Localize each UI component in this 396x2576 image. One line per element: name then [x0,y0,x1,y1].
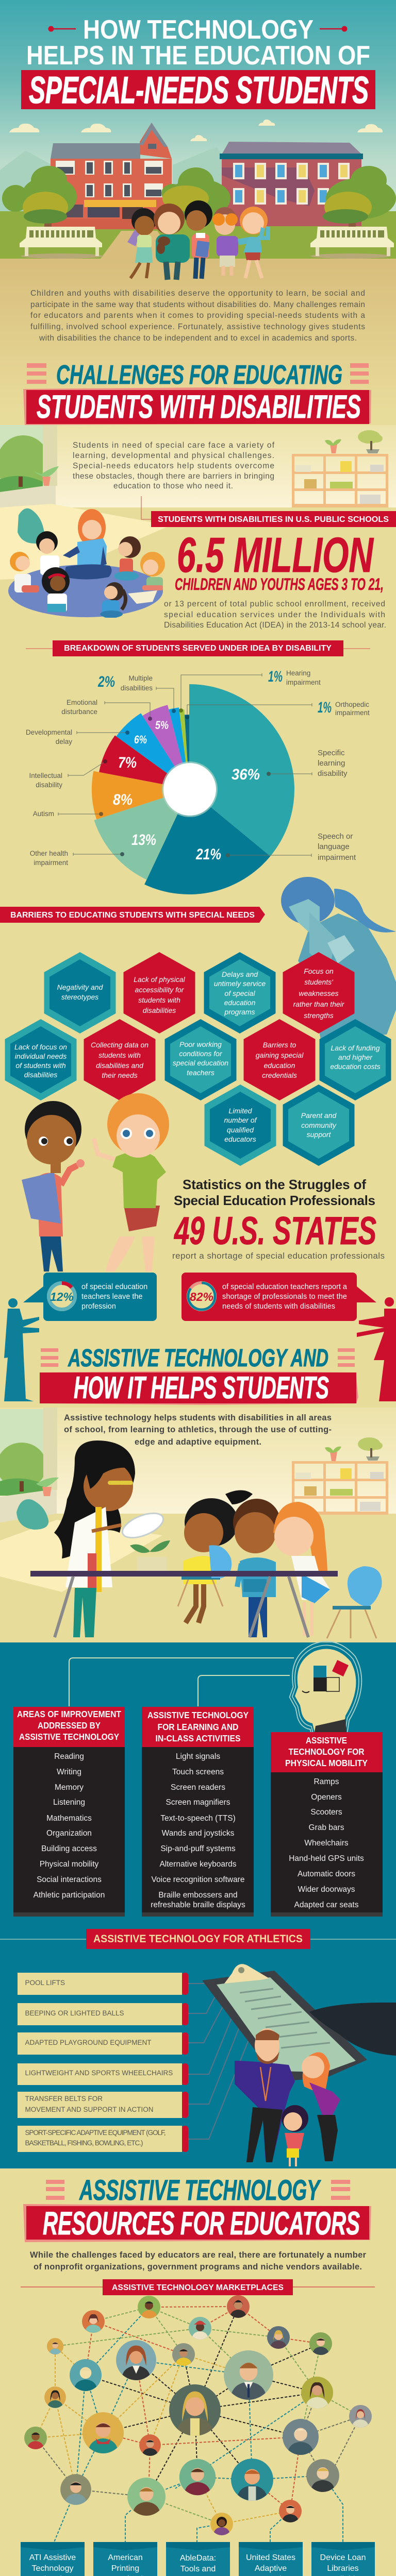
pie category labels [26,669,370,867]
marketplace boxes [21,2542,375,2576]
hexagon: individual needs [5,1019,76,1100]
panel: physical mobility: Wheelchairs [304,1839,349,1848]
panel: physical mobility: Scooters [310,1808,342,1817]
box: AbleData: Tools and [180,2565,216,2573]
hero scene: school campus [0,0,396,412]
pie category labels: Speech or [318,832,353,841]
stat box: 12 percent: profession [81,1302,116,1311]
list item: pool lifts: POOL LIFTS [25,1979,65,1987]
hexagon: delays: programs [224,1008,255,1016]
small percent labels: 1% [268,668,283,685]
box: Device loan: Device Loan [320,2553,366,2562]
pie category labels: disturbance [61,708,97,716]
hexagon: credentials: education [264,1061,295,1070]
hexagon: working conditions: special education [173,1059,228,1067]
box: ATI: ATI Assistive [29,2553,76,2562]
intro paragraph: fulfilling, involved school experience. Fortunately, assistive technology gives students [30,323,365,331]
list item: sport specific: BASKETBALL, FISHING, BOWLING, ETC.) [25,2139,143,2147]
section heading: challenges [23,360,371,425]
pie value labels: 5% [155,719,169,732]
box: USARC: United States [246,2553,295,2562]
panel: teal technology section [0,1642,396,2168]
pie category labels: impairment [318,853,356,862]
pie category labels: language [318,842,350,851]
stat banner: students in U.S. public schools: STUDENTS WITH DISABILITIES IN U.S. PUBLIC SCHOOLS [158,515,389,524]
panel: learning technology: Wands and joysticks [162,1829,235,1838]
hexagon: credentials: credentials [262,1071,297,1079]
panel: physical mobility: Automatic doors [298,1870,355,1878]
pie category labels: Intellectual [29,772,62,779]
hexagon: focus on weaknesses: students' [304,978,334,986]
list item: wheelchairs [18,2063,188,2085]
hexagon: funding: and higher [338,1053,373,1061]
stat banner: students in U.S. public schools [151,511,396,527]
challenges paragraph: learning, developmental and physical challenges. [73,451,274,460]
panel: learning technology [142,1707,254,1917]
stat box: 82 percent: needs of students with disabilities [222,1302,335,1311]
panel: physical mobility [271,1732,383,1917]
hexagon: focus on weaknesses: Focus on [304,967,334,975]
pie category labels: Hearing [286,669,310,677]
benches [20,227,394,259]
icon: head with puzzle [290,1641,361,1740]
illustration: teacher with students on rug [8,509,165,618]
list item: sport specific [18,2126,188,2152]
hexagon: limited educators [204,1084,276,1166]
hexagon: delays: Delays and [222,970,258,978]
marketplaces heading [21,2279,375,2295]
pie category labels: Orthopedic [335,701,369,708]
teacher [54,1440,167,1637]
hexagon: negativity: Negativity and [57,983,104,991]
shelf [292,454,388,507]
panel: areas of improvement: ASSISTIVE TECHNOLOGY [19,1732,119,1742]
box: USARC [239,2542,303,2576]
panel: physical mobility: ASSISTIVE [306,1735,347,1745]
girl [282,2105,308,2132]
pie value labels: 6% [134,733,147,746]
list item: playground [18,2032,188,2055]
pie chart: disability breakdown [26,668,370,894]
stat description: Disabilities Education Act (IDEA) in the 2013-14 school year. [164,621,386,630]
challenges paragraph: education to those who need it. [113,482,233,490]
challenges paragraph: Students in need of special care face a variety of [73,441,275,450]
pie leader lines [58,673,312,857]
hexagon: focus on weaknesses: strengths [304,1011,334,1020]
box: ATI [21,2542,85,2576]
hexagon: negativity: stereotypes [61,993,98,1001]
network of people [24,2295,372,2576]
list item: balls: BEEPING OR LIGHTED BALLS [25,2009,124,2017]
panel: areas of improvement: Building access [41,1844,97,1853]
stat box: 12 percent [23,1273,157,1321]
panel: physical mobility: Openers [311,1793,342,1802]
panel: learning technology: Voice recognition software [152,1875,244,1884]
panel: physical mobility: Ramps [314,1777,339,1786]
pie category labels: Specific [318,749,345,757]
barriers banner: BARRIERS TO EDUCATING STUDENTS WITH SPECIAL NEEDS [10,911,255,920]
intro paragraph: participate in the same way that students without disabilities do. Many challenges remain [30,300,365,309]
shelf [292,1461,388,1515]
athletics list [18,1973,188,2152]
panel: areas of improvement: Social interactions [37,1875,102,1884]
hexagon: individual needs: disabilities [24,1071,57,1079]
hexagon: collecting data: students with [98,1051,141,1059]
panel: learning technology: Screen magnifiers [166,1798,230,1807]
stat description [164,600,386,630]
hexagon: focus on weaknesses: rather than their [293,1000,345,1008]
box: APH [93,2542,157,2576]
hexagon: parent support [283,1084,355,1166]
pie value labels: 13% [131,832,156,849]
pie category labels: disability [318,769,348,778]
classroom background scene 1 [0,425,396,580]
box: AbleData: AbleData: [180,2554,216,2563]
stat box: 12 percent: teachers leave the [81,1293,142,1301]
pie category labels: impairment [335,709,370,717]
stat box: 82 percent [182,1273,376,1321]
title decoration left [51,28,76,29]
small percent labels [97,668,332,716]
list item: sport specific: SPORT-SPECIFIC ADAPTIVE EQUIPMENT (GOLF, [25,2129,166,2137]
hexagon: working conditions: conditions for [179,1049,223,1058]
right purple building [220,142,363,226]
panel: learning technology: Touch screens [172,1768,224,1776]
marketplaces heading: ASSISTIVE TECHNOLOGY MARKETPLACES [112,2283,284,2292]
list item: belts: MOVEMENT AND SUPPORT IN ACTION [25,2106,154,2113]
panel: learning technology: FOR LEARNING AND [158,1722,238,1732]
panel: learning technology: Light signals [176,1752,220,1761]
intro paragraph: with disabilities the chance to be independent and to excel in academics and sports. [39,334,357,343]
panel: learning technology: refreshable braille displays [151,1901,245,1909]
coach [235,2061,295,2161]
hexagon: individual needs: of students with [15,1061,66,1070]
silhouette: thinking woman [281,877,396,1040]
intro paragraph: for educators and parents when it comes to providing special-needs students with a [30,311,365,320]
hexagon: funding: education costs [330,1062,381,1071]
pie category labels: Autism [33,810,54,818]
statistics heading: report a shortage of special education professionals [172,1251,385,1261]
hexagon: focus on weaknesses: weaknesses [299,989,339,997]
hexagon: individual needs: Lack of focus on [14,1043,67,1051]
boy [233,1499,280,1637]
hexagon: limited educators: educators [224,1135,256,1143]
illustration: boy and girl [22,1093,169,1272]
resources paragraph [30,2250,367,2272]
pie category labels: disabilities [121,684,153,692]
hexagon: physical accessibility: students with [138,996,180,1004]
pie category labels: Other health [30,850,68,857]
clouds [9,120,383,141]
table [30,1571,338,1637]
resources paragraph: While the challenges faced by educators are real, there are fortunately a number [30,2250,367,2260]
hexagon: collecting data [84,1019,156,1100]
statistics heading [172,1177,385,1261]
small percent labels: 1% [318,699,332,716]
hexagon grid: barriers [5,952,391,1166]
challenges paragraph: these obstacles, though there are barriers in bringing [73,472,274,481]
pie value labels: 21% [195,846,221,863]
pie category labels: Emotional [67,699,97,706]
hexagon: parent support: Parent and [301,1111,337,1120]
illustration: teacher with magnifier and children at table [30,1440,382,1638]
panel: physical mobility: PHYSICAL MOBILITY [285,1758,368,1768]
athletics heading: ASSISTIVE TECHNOLOGY FOR ATHLETICS [93,1933,303,1945]
panel: physical mobility: TECHNOLOGY FOR [289,1747,365,1757]
box: ATI: Technology [32,2564,73,2573]
hexagon: delays: education [224,998,256,1007]
pie value labels: 8% [113,791,133,808]
hexagon: negativity [44,952,116,1033]
classroom background scene 2 [0,1408,396,1642]
hexagon: delays: untimely service [214,979,266,988]
illustration: group of five children [127,200,268,280]
panel: areas of improvement: Writing [57,1768,81,1776]
hexagon: physical accessibility: disabilities [143,1006,176,1014]
list item: pool lifts [18,1973,188,1995]
silhouettes: speakers [4,1297,396,1401]
panel: learning technology: IN-CLASS ACTIVITIES [156,1733,240,1743]
panel: areas of improvement: Physical mobility [40,1860,99,1869]
assistive technology paragraph: edge and adaptive equipment. [135,1437,261,1447]
panel: learning technology: Text-to-speech (TTS) [160,1814,236,1823]
panel: physical mobility: Grab bars [309,1823,344,1832]
hexagon: collecting data: their needs [102,1071,138,1079]
stat box: 82 percent: shortage of professionals to meet the [222,1293,347,1301]
assistive technology paragraph [64,1413,332,1447]
hexagon: physical accessibility: Lack of physical [134,975,186,984]
hexagon: working conditions [165,1019,236,1100]
hexagon: physical accessibility: accessibility for [135,986,185,994]
panel: learning technology: Sip-and-puff systems [160,1844,236,1853]
hexagon: limited educators: qualified [227,1126,254,1134]
hexagon: credentials: gaining special [256,1051,304,1059]
pie category labels: delay [56,738,72,745]
assistive technology paragraph: Assistive technology helps students with disabilities in all areas [64,1413,332,1422]
left brick building [51,123,172,229]
pie value labels: 36% [232,766,260,783]
panel: learning technology: ASSISTIVE TECHNOLOGY [147,1710,249,1720]
assistive technology paragraph: of school, from learning to athletics, through the use of cutting- [64,1425,332,1434]
hexagon: funding: Lack of funding [331,1044,380,1052]
box: APH: American [108,2553,143,2562]
breakdown heading [26,640,370,656]
pie category labels: impairment [34,859,68,867]
panel: physical mobility: Adapted car seats [294,1901,359,1909]
panel: areas of improvement: Mathematics [46,1814,92,1823]
hexagon: parent support: community [301,1121,337,1129]
stat box: 82 percent: 82% [190,1290,213,1303]
small percent labels: 2% [97,673,115,690]
big stat: 6.5 million [164,528,386,630]
breakdown heading: BREAKDOWN OF STUDENTS SERVED UNDER IDEA BY DISABILITY [64,644,332,653]
pie category labels: Multiple [128,674,153,682]
pie category labels: Developmental [26,728,72,736]
challenges paragraph [73,441,275,490]
pie value labels [113,719,260,863]
statistics heading: Special Education Professionals [174,1193,375,1208]
illustration: clipboard and family [188,1964,396,2166]
title: HOW TECHNOLOGY [83,15,314,45]
hexagon: delays [204,952,275,1033]
right chair [327,1566,382,1638]
section heading: resources for educators [23,2174,371,2242]
list item: wheelchairs: LIGHTWEIGHT AND SPORTS WHEELCHAIRS [25,2069,173,2077]
panel: areas of improvement: Memory [55,1783,84,1792]
panel: learning technology: Screen readers [171,1783,225,1792]
hexagon: parent support: support [307,1130,331,1139]
section heading: assistive technology and how it helps [40,1345,358,1405]
hexagon: credentials: Barriers to [263,1041,296,1049]
stat box: 12 percent: of special education [81,1283,147,1291]
statistics heading: Statistics on the Struggles of [183,1177,366,1192]
hexagon: collecting data: disabilities and [96,1061,144,1070]
intro paragraph [30,289,365,343]
woman [303,2052,330,2094]
hexagon: collecting data: Collecting data on [91,1041,148,1049]
hexagon: individual needs: individual needs [15,1052,67,1060]
hexagon: working conditions: Poor working [179,1040,222,1048]
hexagon: funding [320,1019,391,1100]
pie value labels: 7% [118,754,137,771]
challenges paragraph: Special-needs educators help students overcome [73,462,274,470]
list item: balls [18,2003,188,2025]
pie category labels: learning [318,759,345,768]
barriers banner [0,907,265,923]
list item: belts [18,2092,188,2118]
panel: areas of improvement: AREAS OF IMPROVEMENT [17,1709,121,1719]
panel: physical mobility: Wider doorways [298,1885,355,1894]
hexagon: working conditions: teachers [187,1069,214,1077]
hexagon: limited educators: Limited [228,1107,253,1115]
network lines [36,2307,360,2576]
trees [2,166,396,234]
hexagon: limited educators: number of [224,1116,258,1124]
list item: belts: TRANSFER BELTS FOR [25,2095,103,2103]
plant on windowsill [34,466,59,477]
connector line [141,496,151,519]
panel: areas of improvement: Reading [54,1752,84,1761]
panel: areas of improvement: ADDRESSED BY [38,1720,101,1731]
intro paragraph: Children and youths with disabilities deserve the opportunity to learn, be social and [30,289,365,298]
network avatars [24,2295,372,2535]
stat description: special education services under the Individuals with [164,611,385,619]
athletics heading [0,1929,396,1949]
panel: areas of improvement [13,1707,125,1917]
stat description: or 13 percent of total public school enrollment, received [164,600,385,608]
box: APH: Printing [111,2564,139,2573]
stat box: 82 percent: of special education teachers report a [222,1283,348,1291]
panel: physical mobility: Hand-held GPS units [289,1854,364,1863]
pie category labels: disability [36,781,62,789]
pie category labels: impairment [286,679,321,686]
panel: learning technology: Alternative keyboards [159,1860,237,1869]
box: AbleData [166,2542,230,2576]
hexagon: delays: of special [224,989,255,997]
panel: learning technology: Braille embossers and [158,1891,238,1900]
box: Device loan [311,2542,375,2576]
girl [178,1490,253,1623]
plant in jar [130,1540,170,1571]
hexagon: physical accessibility [124,952,195,1033]
girl with orange hair [273,1502,330,1636]
panel: areas of improvement: Organization [46,1829,92,1838]
stat box: 12 percent: 12% [50,1290,74,1303]
connector lines from head to columns [69,1658,294,1706]
panel: areas of improvement: Athletic participation [34,1891,105,1900]
list item: playground: ADAPTED PLAYGROUND EQUIPMENT [25,2039,152,2046]
box: USARC: Adaptive [255,2564,287,2573]
hexagon: credentials [243,1019,316,1100]
hexagon: focus on weaknesses [283,952,355,1033]
box: Device loan: Libraries [327,2564,359,2573]
panel: areas of improvement: Listening [53,1798,85,1807]
title [21,15,375,111]
resources paragraph: of nonprofit organizations, government programs and niche vendors available. [34,2262,362,2272]
